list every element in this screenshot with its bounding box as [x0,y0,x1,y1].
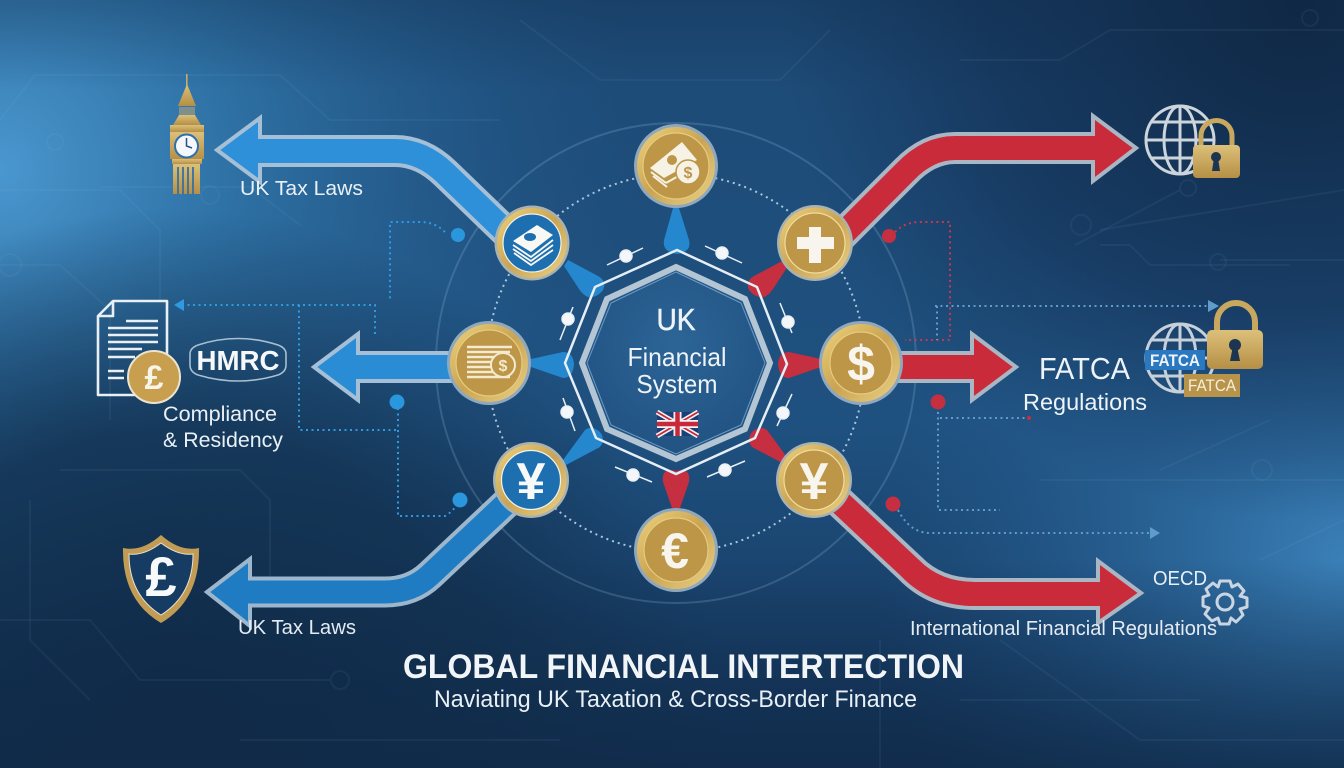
dot nodes: blue [390,228,468,508]
dotted inner ring [487,174,865,552]
arrow: middle right red [870,334,1016,400]
text: System: System [636,369,718,399]
central octagon panel [565,250,787,474]
dotted connection lines: red and steel right [895,222,1208,533]
label: UK Tax Laws upper: UK Tax Laws [240,178,363,200]
icon: pound shield: £ [145,545,177,608]
text: Financial: Financial [628,342,726,372]
subtitle: Naviating UK Taxation & Cross-Border Finance [434,686,917,713]
heading: UK: UK [656,302,696,337]
coin: lower right, yen [776,442,852,518]
label: International Financial Regulations: International Financial Regulations [910,618,1217,640]
icon: globe with lock and FATCA tags [1145,303,1263,397]
icon: gear [1203,581,1247,624]
label: FATCA Regulations [1023,351,1147,415]
icon: document with pound coin [98,301,180,403]
arrowhead: compliance pointer [174,299,184,311]
label: Compliance and Residency: Compliance [163,403,277,426]
small node markers around octagon [560,246,794,482]
label: FATCA Regulations: Regulations [1023,389,1147,415]
icon: union flag [657,412,698,436]
badge: HMRC [190,338,286,381]
arrow: upper right red [815,116,1136,262]
coin: lower left, blue yen [493,442,569,518]
icon: plus [797,227,834,263]
label: OECD: OECD [1153,568,1207,590]
label: Compliance and Residency: & Residency [163,429,284,452]
coin: upper left, blue with cash stack [494,206,570,280]
arrow: lower left blue [207,480,531,626]
text: dollar sign: $ [847,336,875,392]
connectors: red petals [663,260,821,508]
label: FATCA Regulations: FATCA [1039,351,1130,386]
coin: left, notes and dollar [447,321,531,405]
icon: banknote stack: $ [684,165,693,182]
inner thick octagon [582,267,770,459]
title: GLOBAL FINANCIAL INTERTECTION [403,648,964,686]
connectors: blue petals [531,208,690,465]
coin: bottom, euro [634,508,718,592]
arrow: middle left blue [314,334,480,400]
dot nodes: red [882,229,1031,512]
label: Compliance and Residency [163,403,284,452]
arrowhead: right upper pointer [1208,300,1219,312]
icon: notes with dollar: $ [499,358,508,375]
text: yen sign: ¥ [517,453,546,511]
dotted connection lines: blue left [174,222,456,516]
coin: upper right, plus [777,205,853,281]
tag: blue FATCA: FATCA [1150,351,1200,370]
large faint orbit ring [436,123,916,603]
icon: pound shield [123,535,199,623]
icon: Big Ben tower [170,74,204,194]
icon: banknote stack [513,225,553,265]
label: UK Tax Laws lower: UK Tax Laws [238,617,356,639]
text: euro sign: € [661,523,689,579]
tag: gold FATCA: FATCA [1188,376,1237,395]
coin: right, dollar [819,321,903,405]
arrow: upper left blue [217,118,530,255]
outer thin octagon [565,250,787,474]
badge: HMRC: HMRC [196,345,280,376]
arrow: lower right red [814,478,1141,623]
arrowhead: right lower pointer [1150,527,1160,539]
coin: top, cash and dollar [634,124,718,208]
text: yen sign: ¥ [800,453,829,511]
icon: document with pound coin: £ [145,359,164,397]
icon: globe with lock [1146,106,1240,178]
